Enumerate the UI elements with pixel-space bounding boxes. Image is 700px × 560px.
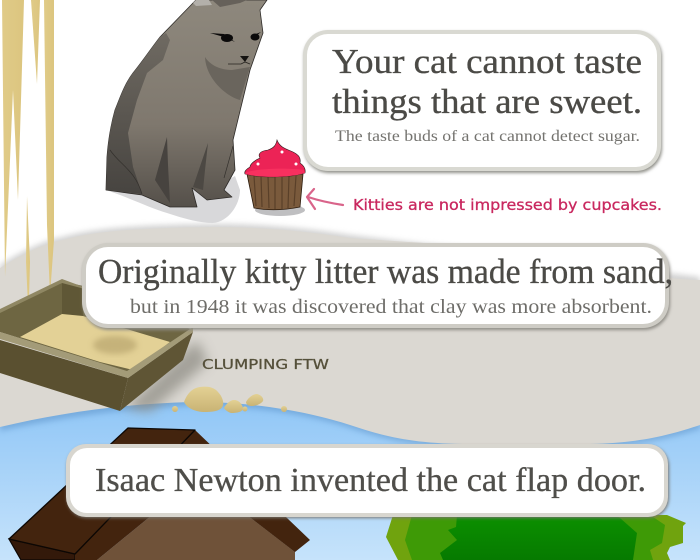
litter box walls <box>0 280 193 372</box>
icon: house <box>9 428 310 560</box>
cat inner leg shadow <box>155 137 170 203</box>
icon: bush <box>386 515 686 560</box>
litter sand blotch <box>93 336 137 354</box>
cat ear <box>193 0 212 6</box>
cat dark flank <box>106 33 170 194</box>
panel: litter fact <box>82 243 673 330</box>
cat nose and mouth <box>240 56 249 62</box>
house wall shade <box>247 515 295 552</box>
icon: sand clumps <box>172 387 287 413</box>
panel: sweet fact <box>303 30 662 173</box>
icon: cupcake <box>245 140 305 216</box>
heading: sweet fact: Your cat cannot taste <box>332 42 642 81</box>
hill shadow on the sky <box>0 300 700 447</box>
cupcake shadow <box>255 204 305 216</box>
house roof back slab <box>75 430 310 560</box>
sky panel <box>0 390 700 560</box>
callout: kitties: Kitties are not impressed by cupcakes. <box>353 196 662 214</box>
cat body <box>106 0 267 207</box>
callout: clumping: CLUMPING FTW <box>202 358 329 373</box>
heading: newton fact: Isaac Newton invented the cat flap door. <box>95 462 646 499</box>
text: litter detail: but in 1948 it was discovered that clay was more absorbent. <box>130 296 652 318</box>
hill shadow on white <box>0 224 700 300</box>
cupcake sparkles <box>256 150 298 166</box>
icon: falling sand <box>2 0 54 317</box>
litter box rim <box>0 327 193 378</box>
panel: grey hill <box>0 227 700 444</box>
litter box front <box>0 340 128 411</box>
litter box shadow <box>125 340 208 412</box>
icon: litter box <box>0 279 208 412</box>
cupcake wrapper <box>247 174 303 210</box>
text: taste buds: The taste buds of a cat cannot detect sugar. <box>335 128 640 145</box>
house roof left <box>9 428 195 554</box>
arrow: to cupcake <box>307 189 343 209</box>
litter sand <box>20 314 170 370</box>
cat leg lines <box>110 146 233 194</box>
cat eyes <box>210 32 261 42</box>
litter box side <box>120 332 193 411</box>
cat chest marking <box>205 57 250 100</box>
cupcake frosting <box>245 140 305 177</box>
house roof underside <box>9 539 75 560</box>
icon: cat <box>106 0 267 223</box>
heading: sweet fact line two: things that are sweet. <box>332 82 642 121</box>
panel: newton fact <box>66 444 669 518</box>
heading: litter fact: Originally kitty litter was made from sand, <box>98 252 673 291</box>
house wall <box>97 515 295 560</box>
cat shadow <box>106 176 240 223</box>
